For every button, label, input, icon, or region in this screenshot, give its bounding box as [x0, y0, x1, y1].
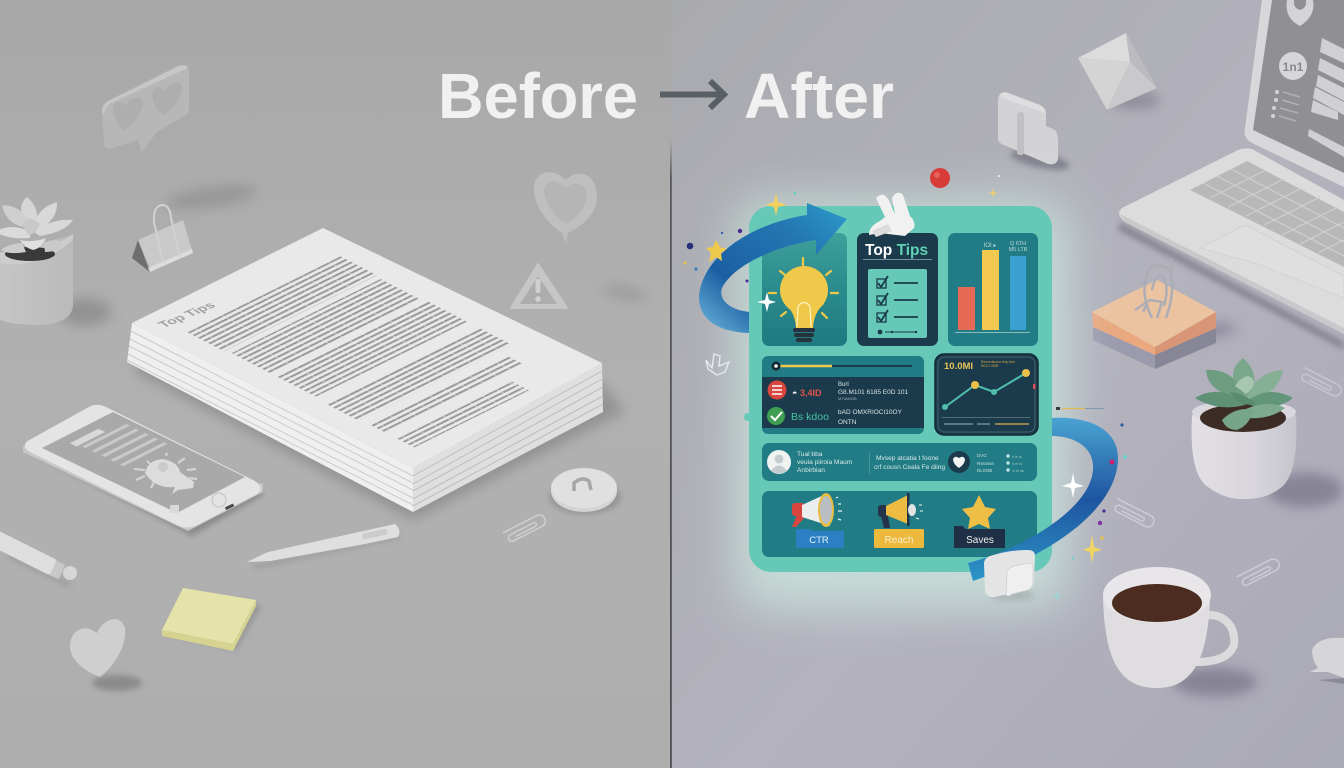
icon: warning triangle — [511, 264, 567, 308]
panel: Top Tips tile — [857, 233, 938, 346]
chart caption: Recordscore ttrip ijne — [981, 360, 1015, 364]
panel: profile row — [762, 443, 1037, 481]
badge: Reach: Reach — [885, 535, 913, 546]
bar chart tile — [948, 233, 1038, 346]
icon: floating heart — [70, 619, 142, 691]
panel: metrics row — [762, 356, 924, 434]
icon: pen tip — [247, 524, 400, 567]
card glow — [735, 200, 1070, 610]
icon: yellow megaphone — [878, 493, 923, 528]
metric: after value: Bs kdoo — [791, 411, 829, 423]
small mini legend — [1056, 407, 1104, 410]
icon: sticky note — [162, 588, 262, 651]
badge: CTR: CTR — [809, 535, 829, 546]
badge: Reach — [874, 529, 924, 548]
profile description: Mvsep atcatia t foone — [876, 455, 939, 462]
sparkle on bulb tile — [757, 292, 776, 312]
bar: yellow — [982, 250, 999, 330]
profile description: crf cousn Ceala Fe diing — [874, 464, 945, 471]
title word: After: After — [744, 60, 894, 132]
stack shadow — [135, 350, 625, 520]
icon: red megaphone — [792, 493, 842, 527]
shadow by warning sign — [602, 282, 648, 304]
plant leaves — [1195, 358, 1293, 430]
legend — [977, 453, 1024, 473]
laptop touchpad — [1200, 225, 1344, 298]
badge: Saves — [954, 526, 1005, 548]
icon: smartphone — [23, 405, 265, 536]
icon: light bulb — [757, 258, 838, 342]
shadow of pot — [59, 298, 111, 326]
icon: peach block with bulb clip — [1092, 258, 1240, 370]
panel: bulb tile — [757, 233, 847, 346]
legend: DVG — [977, 453, 987, 458]
metric: before value: ◓ 3,4ID — [792, 388, 822, 398]
icon: blue curved arrow — [699, 203, 847, 333]
profile text: Tual bba — [797, 451, 823, 458]
panel: after desk — [998, 0, 1344, 696]
icon: binder clip — [132, 205, 193, 272]
panel: redesigned infographic card — [735, 200, 1070, 610]
icon: paperclip middle — [1112, 498, 1156, 529]
laptop base — [1119, 148, 1344, 334]
badge: CTR — [796, 529, 844, 548]
icon: paperclip left — [503, 513, 547, 544]
bar labels: IOI ▸ — [984, 243, 996, 249]
line series — [942, 369, 1030, 410]
phone screen text — [70, 419, 169, 469]
background: after side — [671, 0, 1344, 768]
icon: speech bubble right edge — [1310, 638, 1344, 684]
bar: red — [958, 287, 975, 330]
stack right edge — [413, 363, 603, 512]
line chart tile: KDCI OBR — [981, 364, 999, 368]
top sheet — [132, 228, 602, 468]
metric: after note: ONTN — [838, 419, 857, 426]
icon: star — [962, 495, 996, 529]
icon: red menu badge — [768, 380, 786, 400]
line chart tile — [935, 354, 1038, 435]
legend: ri ls ls — [1012, 455, 1022, 459]
background: before side — [0, 0, 671, 768]
icon: round clip button — [549, 468, 621, 514]
panel: before desk — [0, 65, 648, 691]
laptop lid — [1245, 0, 1344, 187]
document stack: Top Tips — [127, 228, 625, 520]
icon: laptop — [1118, 0, 1344, 350]
profile text: Anbirbian — [797, 467, 825, 474]
profile text — [797, 451, 853, 474]
red ball — [930, 168, 950, 188]
divider between before and after — [670, 140, 672, 768]
icon: white 3D block — [998, 92, 1071, 174]
icon: blue curved ribbon — [968, 418, 1118, 581]
legend: Rsssssn — [977, 461, 994, 466]
tile heading: Top Tips — [865, 242, 928, 259]
progress slider — [772, 362, 912, 370]
shadow of speech bubble — [165, 181, 259, 213]
metric: before note: G8.M101 6185 E0D 101 — [838, 389, 908, 396]
sparkles and confetti — [684, 175, 1127, 600]
stack front edge — [127, 323, 413, 512]
icon: speech bubble with hearts — [102, 65, 189, 152]
bar chart tile: M5 LTB — [1009, 247, 1028, 253]
title — [438, 60, 894, 132]
icon: paperclip top right — [1299, 367, 1343, 398]
laptop screen bullets — [1271, 90, 1300, 121]
arrow: before to after — [660, 81, 724, 108]
bar chart tile: Q 6TH — [1010, 241, 1026, 247]
legend: DLSOB — [977, 468, 992, 473]
icon: pen — [0, 538, 77, 585]
icon: heart balloon — [534, 172, 597, 243]
laptop avatar — [1287, 0, 1313, 26]
panel: metric badges row — [762, 491, 1037, 557]
title word: Before: Before — [438, 60, 638, 132]
laptop screen badge: 1n1 — [1283, 60, 1304, 74]
chart value: 10.0MI — [944, 361, 973, 372]
profile description — [874, 455, 945, 471]
phone bulb icon — [134, 453, 197, 494]
metric: before note — [838, 382, 908, 401]
laptop shadow — [1118, 222, 1344, 350]
metric: before note: MTIAMOB — [838, 396, 857, 401]
laptop screen badge — [1279, 52, 1307, 80]
icon: avatar — [767, 450, 791, 474]
icon: coffee cup — [1103, 567, 1257, 696]
metric: after note: bAD OMXRIOCI10OY — [838, 409, 903, 416]
legend: rl m ls — [1012, 462, 1022, 466]
document text lines — [188, 256, 565, 448]
badge: Saves: Saves — [966, 535, 994, 546]
icon: polyhedron — [1078, 33, 1160, 110]
metric: after note — [838, 409, 903, 426]
metric: before note: Burl — [838, 382, 849, 388]
icon: potted plant — [1192, 358, 1343, 507]
icon: paperclip lower — [1237, 557, 1281, 588]
icon: small white outline hand — [706, 354, 729, 375]
icon: potted succulent — [0, 197, 73, 325]
laptop screen bars — [1308, 38, 1344, 157]
profile text: veuia piiroia Maum — [797, 459, 853, 466]
checklist — [868, 269, 927, 338]
icon: white clip on ribbon — [984, 550, 1035, 601]
icon: green check badge — [767, 407, 785, 425]
legend: Jl m as — [1012, 469, 1024, 473]
bar: blue — [1010, 256, 1026, 330]
card background — [749, 206, 1052, 572]
icon: heart badge — [948, 451, 970, 473]
icon: white hand clip — [869, 193, 914, 237]
document heading: Top Tips — [155, 300, 219, 330]
laptop keyboard — [1190, 161, 1344, 267]
